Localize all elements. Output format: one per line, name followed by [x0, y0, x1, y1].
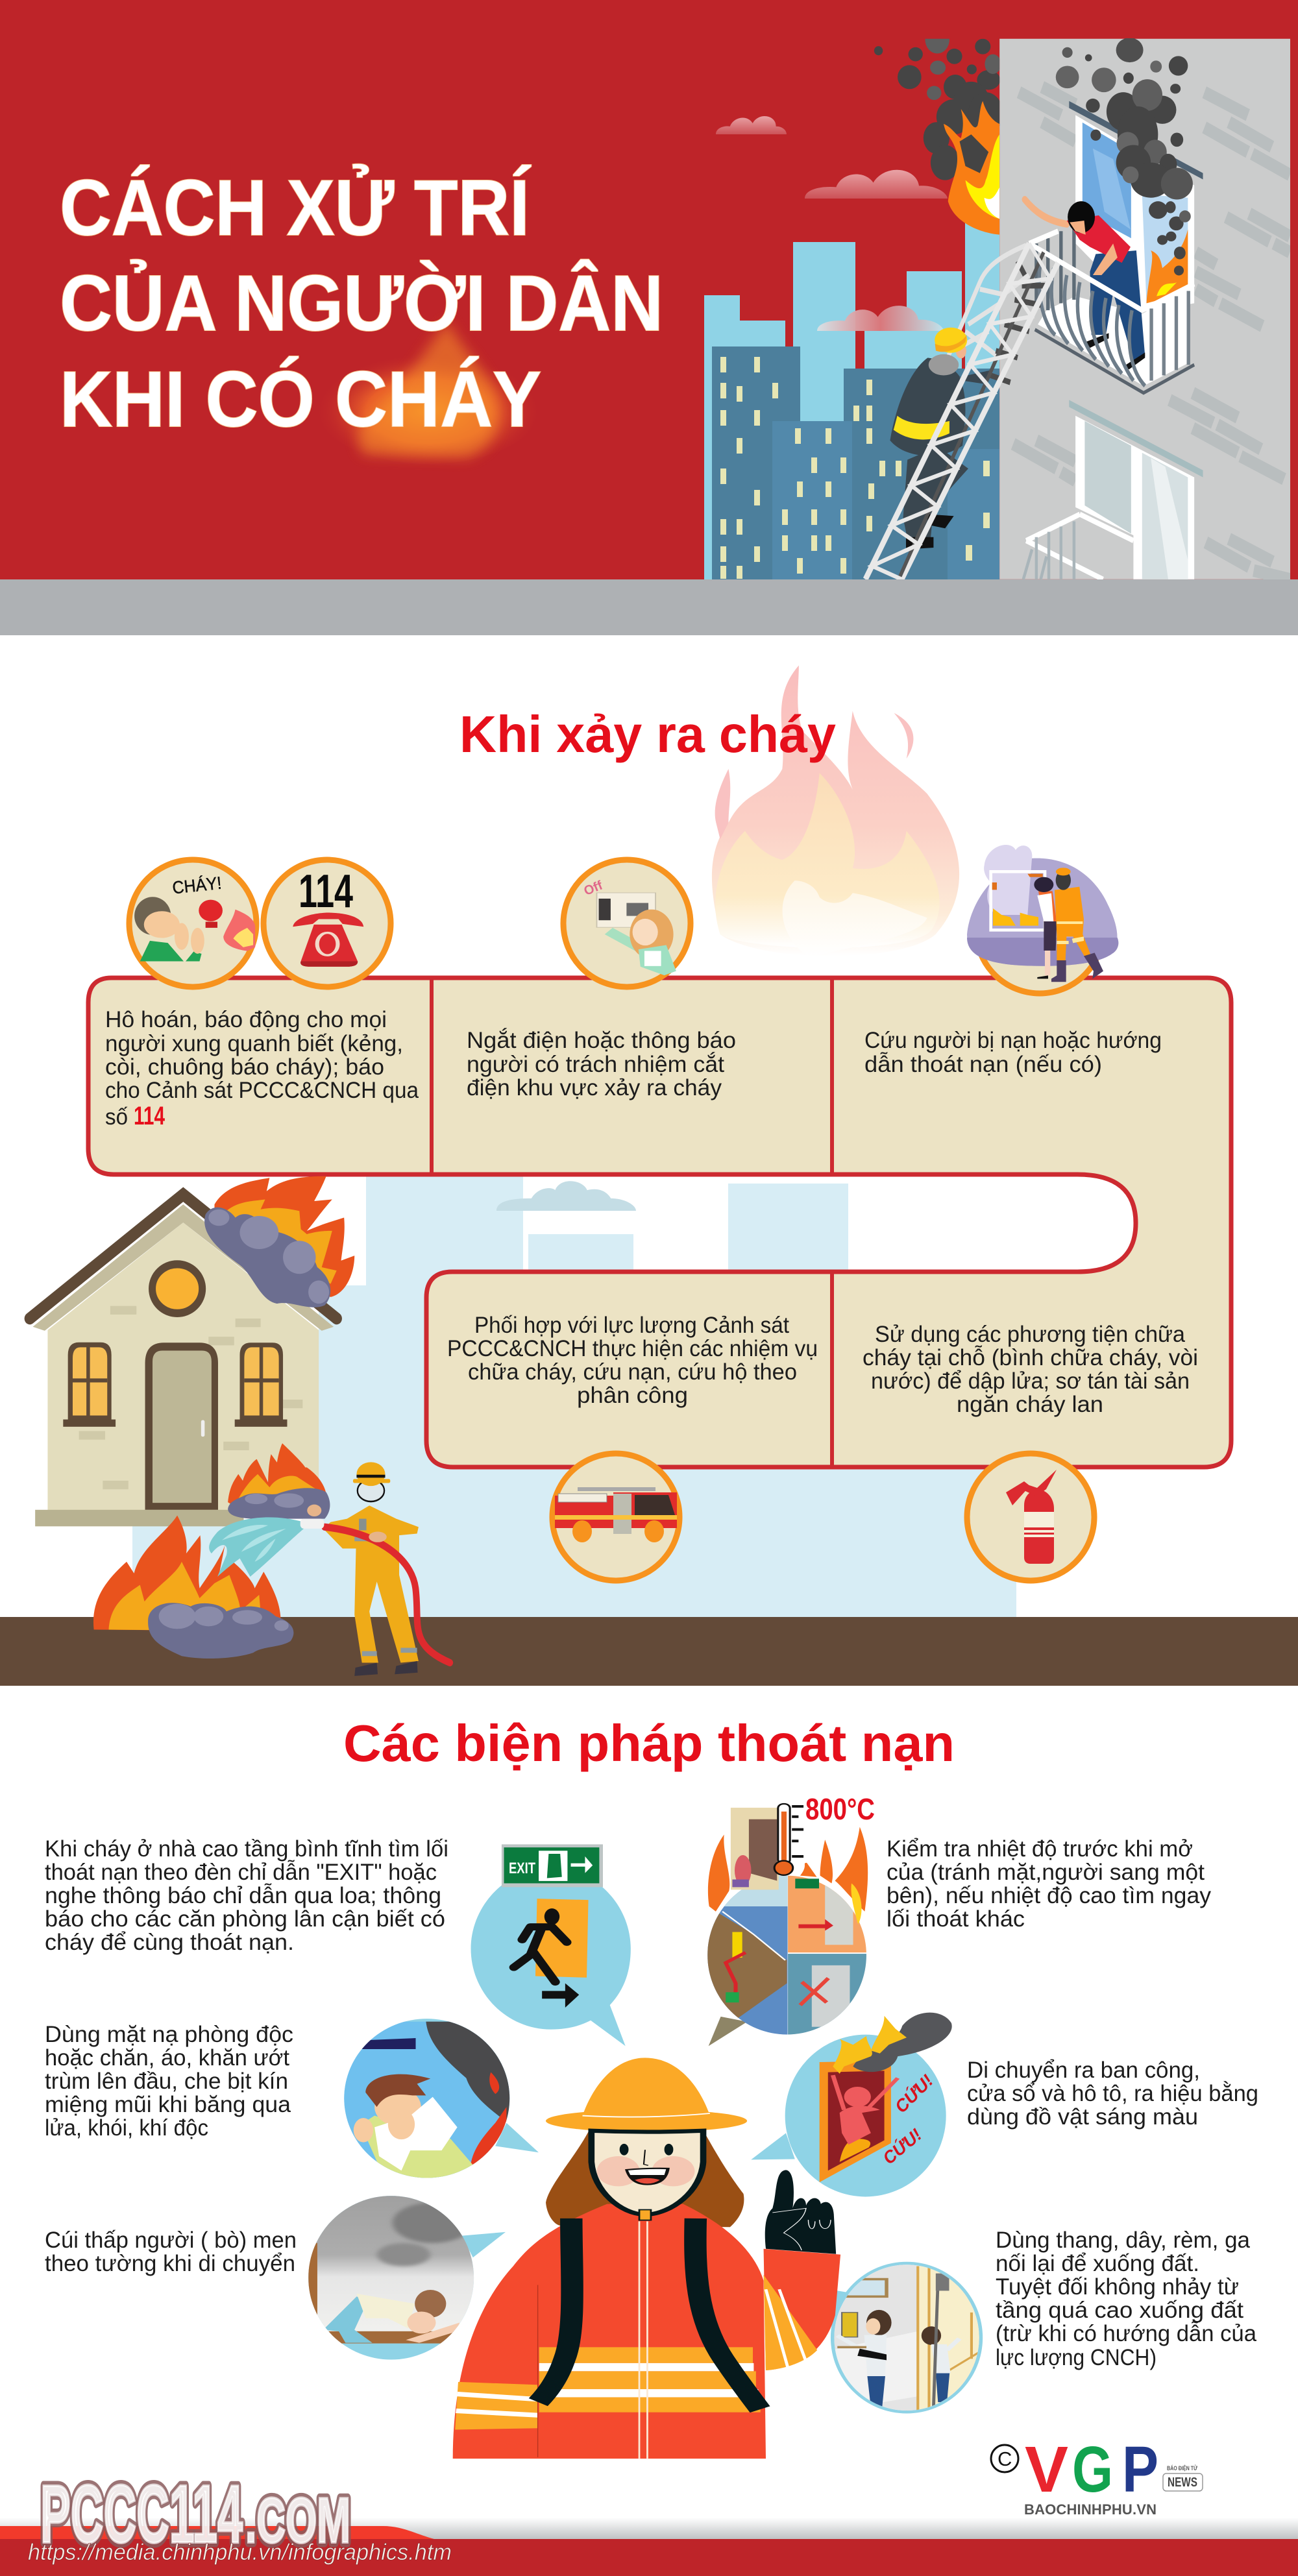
steps table: serpentine panel [88, 978, 1231, 1467]
step 1 text: số [105, 1104, 128, 1130]
escape text 2: Kiểm tra nhiệt độ trước khi mở [887, 1836, 1193, 1862]
wall bricks [1013, 87, 1290, 579]
step 5 text [863, 1322, 1198, 1417]
water jet [209, 1517, 304, 1577]
rescue ladder [865, 243, 1058, 579]
escape text 6: Tuyệt đối không nhảy từ [996, 2274, 1239, 2300]
glove [765, 2170, 836, 2254]
VGP logo: G [1072, 2433, 1113, 2506]
VGP logo: BAOCHINHPHU.VN [1024, 2501, 1157, 2518]
escape text 1: báo cho các căn phòng lân cận biết có [45, 1906, 445, 1932]
heading: Khi xảy ra cháy flame backdrop [712, 666, 959, 957]
step 2 text: người có trách nhiệm cắt [467, 1052, 724, 1077]
bubble: check temperature: 800°C [805, 1792, 875, 1826]
escape text 1: cháy để cùng thoát nạn. [45, 1930, 294, 1955]
escape text 5 [967, 2058, 1258, 2130]
step 2 text [467, 1028, 736, 1100]
watermark PCCC114.COM: PCCC114 [40, 2468, 243, 2560]
hat [546, 2109, 747, 2132]
icon: 114 telephone [263, 860, 391, 987]
upper window [1069, 101, 1203, 312]
bubble: crawling low [308, 2196, 506, 2360]
heading: Các biện pháp thoát nạn: Các biện pháp thoát nạn [343, 1714, 955, 1772]
icon: shouting man and alarm [129, 860, 256, 987]
step 1 text: 114 [134, 1102, 165, 1130]
escape text 3: miệng mũi khi băng qua [45, 2092, 291, 2117]
escape text 1 [45, 1836, 448, 1955]
watermark PCCC114.COM: .COM [245, 2485, 350, 2556]
zipper [639, 2221, 647, 2459]
balcony back rails [1036, 226, 1074, 310]
balcony railings [1029, 231, 1194, 393]
illustration: burning house and firefighter [30, 1176, 450, 1676]
left wall fire and smoke [874, 25, 1003, 235]
bubble: exit sign: EXIT [509, 1860, 535, 1877]
step 5 text: nước) để dập lửa; sơ tán tài sản [871, 1368, 1190, 1394]
bubble: exit sign [471, 1844, 631, 2046]
icon: 114 telephone: 114 [299, 866, 353, 917]
icon: cutting power at switchboard: Off [582, 879, 605, 899]
firefighter with hose [300, 1462, 450, 1676]
escape text 1: thoát nạn theo đèn chỉ dẫn "EXIT" hoặc [45, 1860, 437, 1885]
lower window and balcony [1023, 400, 1203, 579]
bubble: ladder and rope descent [804, 2262, 985, 2413]
step 3 text: Cứu người bị nạn hoặc hướng [864, 1028, 1162, 1053]
step 4 text: PCCC&CNCH thực hiện các nhiệm vụ [447, 1336, 818, 1361]
title: KHI CÓ CHÁY [60, 355, 541, 443]
face [591, 2131, 704, 2215]
escape text 3: hoặc chăn, áo, khăn ướt [45, 2045, 289, 2071]
bubble: check temperature [707, 1792, 875, 2046]
escape text 2: của (tránh mặt,người sang một [887, 1860, 1205, 1885]
jacket stripes [455, 2285, 761, 2457]
clouds [716, 116, 948, 331]
step 1 text: người xung quanh biết (kẻng, [105, 1031, 403, 1056]
woman on balcony [1025, 199, 1145, 369]
icon: fire extinguisher [967, 1453, 1094, 1581]
step 1 text [105, 1007, 419, 1130]
hero background [0, 0, 1298, 579]
escape text 2: bên), nếu nhiệt độ cao tìm ngay [887, 1883, 1211, 1908]
escape text 2 [887, 1836, 1211, 1932]
VGP logo: BÁO ĐIỆN TỬ [1167, 2464, 1197, 2472]
escape text 1: Khi cháy ở nhà cao tầng bình tĩnh tìm lối [45, 1836, 448, 1862]
VGP logo [991, 2433, 1203, 2518]
hero right strip [1290, 0, 1298, 579]
backpack straps [538, 2218, 760, 2409]
city skyline dark [712, 346, 999, 579]
escape text 5: dùng đồ vật sáng màu [967, 2104, 1198, 2130]
escape text 4: theo tường khi di chuyển [45, 2251, 295, 2276]
escape text 1: nghe thông báo chỉ dẫn qua loa; thông [45, 1883, 441, 1908]
escape text 6: (trừ khi có hướng dẫn của [996, 2321, 1257, 2346]
icon: firefighter rescuing woman [967, 845, 1118, 993]
house [30, 1195, 337, 1526]
watermark PCCC114.COM: PCCC114 [40, 2468, 243, 2560]
city windows [720, 357, 990, 579]
step 1 text: còi, chuông báo cháy); báo [105, 1054, 384, 1080]
window smoke [1056, 38, 1193, 276]
title flame glow [315, 321, 542, 464]
step 4 text: Phối hợp với lực lượng Cảnh sát [474, 1313, 789, 1338]
doorstep fire [228, 1443, 330, 1519]
step 2 text: điện khu vực xảy ra cháy [467, 1075, 722, 1100]
VGP logo: P [1122, 2433, 1158, 2506]
escape text 5: cửa sổ và hô tô, ra hiệu bằng [967, 2081, 1258, 2106]
escape text 3 [45, 2022, 293, 2141]
building wall [999, 39, 1291, 579]
escape text 3: lửa, khói, khí độc [45, 2115, 208, 2141]
step 5 text: Sử dụng các phương tiện chữa [875, 1322, 1186, 1347]
title: CÁCH XỬ TRÍ [60, 164, 532, 252]
VGP logo: C [998, 2448, 1012, 2470]
hero illustration: city, building, fire and rescue [704, 25, 1291, 579]
source url: https://media.chinhphu.vn/infographics.htm [28, 2540, 452, 2565]
bubble: mask over mouth [343, 2019, 539, 2180]
footer band [0, 2518, 1298, 2576]
escape text 6: tầng quá cao xuống đất [996, 2298, 1243, 2323]
VGP logo: NEWS [1168, 2475, 1197, 2490]
step 4 text: chữa cháy, cứu nạn, cứu hộ theo [468, 1359, 797, 1385]
step 2 text: Ngắt điện hoặc thông báo [467, 1028, 736, 1053]
scene backdrop: pale city [132, 1176, 1016, 1617]
signal call-outs: CỨU! [879, 2124, 925, 2169]
escape text 6: lực lượng CNCH) [996, 2345, 1157, 2370]
collar buckle [639, 2210, 651, 2220]
title [60, 164, 663, 443]
icon: cutting power at switchboard [563, 860, 691, 987]
escape text 6: Dùng thang, dây, rèm, ga [996, 2228, 1251, 2253]
ground fire [93, 1516, 293, 1659]
step 4 text [447, 1313, 818, 1408]
watermark PCCC114.COM: .COM [245, 2485, 350, 2556]
signal call-outs: CỨU! [890, 2071, 937, 2117]
column dividers [432, 978, 832, 1467]
step 1 text: cho Cảnh sát PCCC&CNCH qua [105, 1078, 419, 1103]
window flames [1146, 230, 1188, 304]
VGP logo: V [1025, 2433, 1068, 2506]
upper ladder section [937, 245, 1046, 384]
ground [0, 1617, 1298, 1686]
step 5 text: ngăn cháy lan [957, 1392, 1103, 1417]
hero grey band [0, 579, 1298, 635]
step 3 text: dẫn thoát nạn (nếu có) [864, 1052, 1102, 1077]
hair [546, 2130, 744, 2227]
step 5 text: cháy tại chỗ (bình chữa cháy, vòi [863, 1345, 1198, 1370]
icon: shouting man and alarm: CHÁY! [171, 873, 223, 897]
escape text 3: trùm lên đầu, che bịt kín [45, 2069, 288, 2094]
step 3 text [864, 1028, 1162, 1077]
step 4 text: phân công [577, 1383, 688, 1408]
escape text 6 [996, 2228, 1257, 2370]
mascot firefighter [453, 2058, 840, 2459]
icon: fire truck [552, 1453, 680, 1581]
jacket [453, 2204, 766, 2459]
title: CỦA NGƯỜI DÂN [60, 258, 663, 347]
escape text 4: Cúi thấp người ( bò) men [45, 2228, 297, 2253]
escape text 6: nối lại để xuống đất. [996, 2251, 1199, 2276]
escape text 2: lối thoát khác [887, 1906, 1025, 1932]
roof fire and smoke [204, 1176, 354, 1307]
escape text 4 [45, 2228, 297, 2276]
signal call-outs [879, 2071, 937, 2169]
upper balcony floor [1038, 289, 1188, 386]
escape text 3: Dùng mặt nạ phòng độc [45, 2022, 293, 2047]
escape text 5: Di chuyển ra ban công, [967, 2058, 1200, 2083]
firefighter on ladder [890, 328, 992, 550]
bubble: signal from window [751, 2013, 952, 2196]
step 1 text: Hô hoán, báo động cho mọi [105, 1007, 387, 1032]
heading: Khi xảy ra cháy: Khi xảy ra cháy [459, 705, 836, 763]
city skyline light [704, 223, 999, 579]
jacket sleeve and stripes [764, 2249, 840, 2370]
